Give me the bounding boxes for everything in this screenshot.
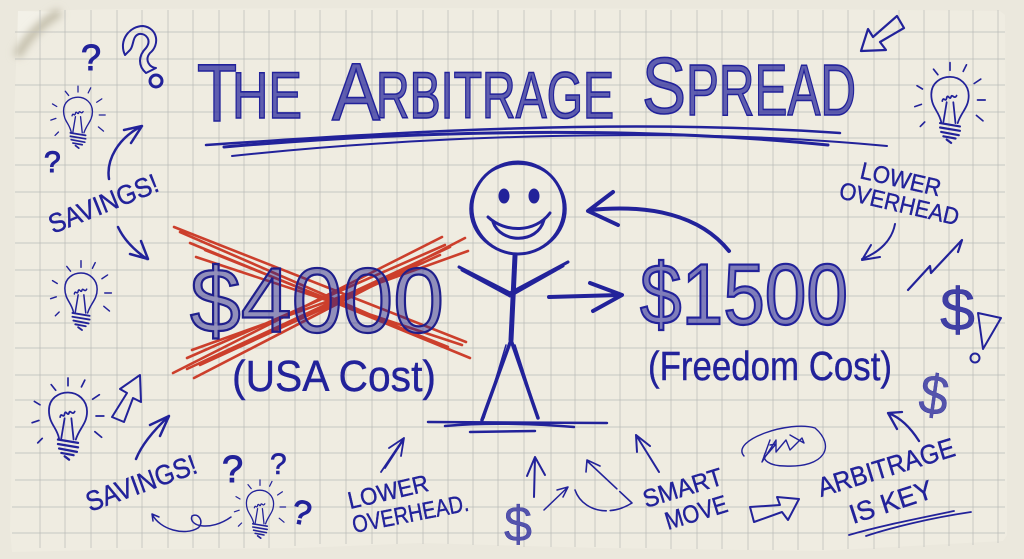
ground (428, 422, 607, 432)
icon: hollow right arrow (750, 497, 799, 522)
stick figure (428, 162, 607, 432)
icon: small question mark: ? (81, 37, 101, 78)
arrow: to dollar right (888, 412, 919, 441)
title underline (206, 127, 887, 156)
question marks bottom (222, 448, 315, 534)
title: T (197, 48, 237, 139)
arrow: savings up (109, 126, 142, 179)
text: smart move: MOVE (662, 490, 731, 536)
text: lower overhead bottom: OVERHEAD. (350, 490, 471, 539)
question marks bottom: ? (270, 448, 287, 481)
title: A (332, 47, 380, 138)
face (488, 189, 550, 238)
icon: exclamation mark (970, 313, 1001, 362)
caption: USA Cost: (USA Cost) (232, 352, 436, 401)
text: smart move (640, 463, 731, 536)
text: arbitrage is key: ARBITRAGE (814, 433, 959, 503)
arrows bottom centre (527, 435, 659, 511)
underline: arbitrage is key (849, 511, 971, 536)
title: PREAD (686, 51, 856, 131)
red cross-out X (173, 227, 470, 378)
icon: question mark left: ? (44, 146, 61, 179)
icon: light bulb top right (915, 63, 985, 143)
arrow: savings lower (136, 416, 169, 459)
title: S (642, 41, 686, 130)
head (470, 162, 566, 254)
text: lower overhead top (837, 158, 962, 231)
squiggle arrow (152, 514, 231, 532)
text: lower overhead top: LOWER (858, 158, 944, 202)
icon: dollar bottom: $ (504, 496, 532, 552)
text: lower overhead bottom (345, 470, 471, 539)
icon: dollar lower right: $ (915, 361, 953, 428)
new cost: $1500: $1500 (640, 247, 848, 343)
arrow: lower overhead down (862, 224, 895, 260)
scribble in oval (742, 426, 825, 466)
old cost: $4000: $4000 (190, 250, 444, 352)
text: savings top: SAVINGS! (44, 168, 163, 240)
title (197, 41, 856, 139)
question marks bottom: ? (288, 493, 315, 534)
arrow: figure to freedom cost (549, 283, 622, 311)
icon: light bulb top left (51, 86, 105, 148)
icon: light bulb left middle (51, 261, 111, 330)
icon: large question mark (123, 26, 162, 87)
text: lower overhead bottom: LOWER (345, 470, 431, 515)
arrow: lower overhead up (381, 438, 404, 472)
text: savings bottom: SAVINGS! (81, 449, 201, 518)
caption: Freedom Cost: (Freedom Cost) (648, 343, 892, 389)
question marks bottom: ? (222, 449, 243, 491)
text: arbitrage is key: IS KEY (846, 475, 937, 530)
text: lower overhead top: OVERHEAD (837, 178, 962, 231)
text: smart move: SMART (640, 463, 726, 514)
icon: zigzag arrow (908, 240, 962, 290)
body and limbs (459, 256, 568, 420)
title: RBITRAGE (376, 58, 614, 132)
icon: light bulb bottom (234, 480, 286, 538)
title: HE (232, 58, 302, 132)
arrow: savings down (118, 227, 148, 259)
text: arbitrage is key (814, 433, 959, 530)
icon: dollar upper right: $ (940, 276, 975, 343)
icon: hollow up arrow (112, 375, 141, 422)
arrow: freedom cost back to head (588, 192, 729, 251)
icon: light bulb lower left (32, 378, 104, 460)
icon: hollow arrow top right (861, 16, 904, 51)
